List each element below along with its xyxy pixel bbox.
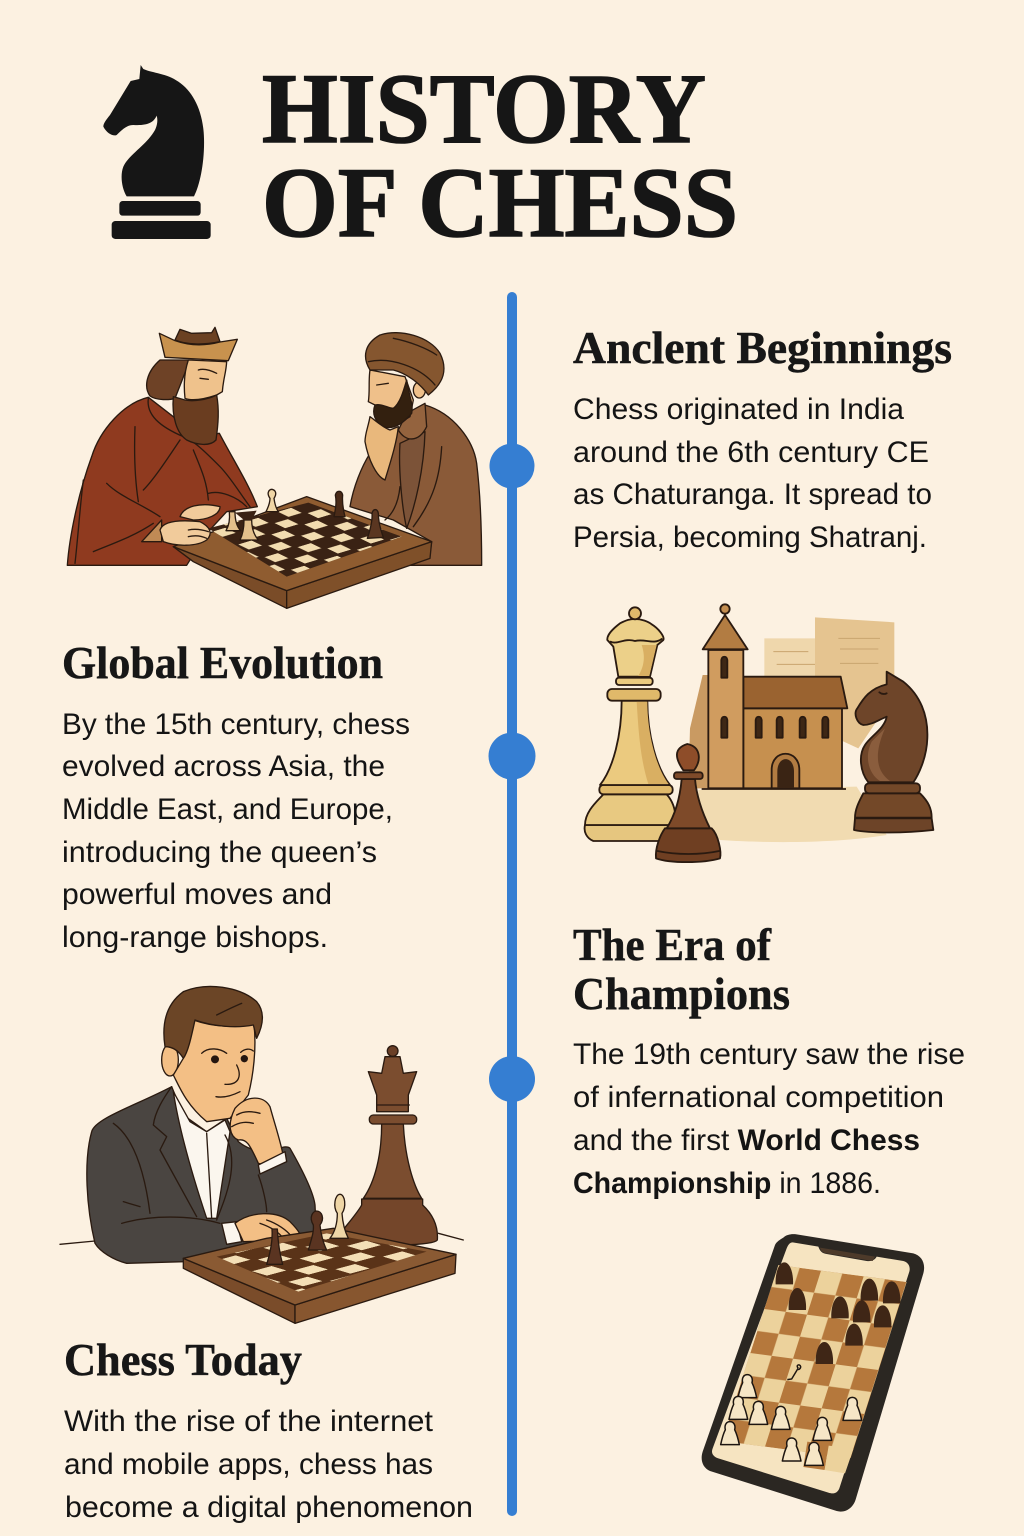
king figure	[67, 327, 257, 565]
text: global evolution body: introducing the queen’s	[62, 836, 377, 869]
small pieces	[267, 1194, 348, 1264]
title	[262, 53, 738, 258]
text: global evolution body: Middle East, and Europe,	[62, 793, 393, 826]
text: chess today body: With the rise of the internet	[64, 1405, 433, 1438]
text: chess today body	[64, 1405, 473, 1524]
black pieces	[776, 1262, 900, 1364]
illustration: man thinking over chess board	[60, 986, 463, 1323]
text: era of champions body	[573, 1038, 965, 1200]
phone notch	[820, 1248, 875, 1261]
illustration: king and scholar playing chess	[67, 327, 482, 608]
text: era of champions body: and the first World Chess	[573, 1124, 920, 1157]
text: global evolution body	[62, 708, 410, 954]
phone screen	[712, 1242, 910, 1493]
icon: black knight	[103, 65, 211, 239]
text: ancient beginnings body: Persia, becoming Shatranj.	[573, 521, 927, 554]
text: chess today body: and mobile apps, chess has	[64, 1448, 433, 1481]
title: HISTORY	[262, 53, 706, 164]
text: global evolution body: evolved across Asia, the	[62, 750, 385, 783]
pawn piece	[656, 744, 720, 862]
illustration: queen, church, pawn and knight	[585, 604, 933, 862]
timeline	[488, 292, 536, 1516]
text: global evolution body: long-range bishops.	[62, 921, 328, 954]
church	[702, 604, 847, 789]
text: ancient beginnings body: as Chaturanga. It spread to	[573, 478, 932, 511]
text: era of champions body: Championship in 1886.	[573, 1167, 881, 1200]
text: chess today body: become a digital phenomenon	[65, 1491, 473, 1524]
knight piece	[854, 672, 933, 832]
text: global evolution body: powerful moves and	[62, 878, 332, 911]
heading: Global Evolution: Global Evolution	[62, 638, 383, 688]
text: era of champions body: The 19th century saw the rise	[573, 1038, 965, 1071]
heading: Chess Today: Chess Today	[64, 1335, 302, 1385]
white pieces	[721, 1365, 862, 1465]
text: ancient beginnings body	[573, 393, 932, 554]
king hands	[142, 505, 220, 545]
large king piece	[333, 1046, 437, 1245]
phone body	[702, 1234, 924, 1512]
papers and ground	[688, 617, 894, 842]
queen piece	[585, 607, 675, 841]
title: OF CHESS	[262, 147, 738, 258]
heading: The Era of Champions	[573, 920, 790, 1019]
chess board	[173, 497, 432, 608]
heading: Ancient Beginnings: Anclent Beginnings	[573, 323, 952, 373]
text: global evolution body: By the 15th century, chess	[62, 708, 410, 741]
chess pieces	[226, 489, 383, 540]
scholar figure	[350, 333, 482, 565]
text: ancient beginnings body: Chess originated in India	[573, 393, 905, 426]
heading: The Era of Champions: The Era of	[573, 920, 772, 970]
man	[87, 986, 317, 1263]
board	[183, 1228, 456, 1323]
text: era of champions body: of infernational competition	[573, 1081, 944, 1114]
illustration: smartphone with chess app	[702, 1234, 924, 1512]
phone chess board	[722, 1265, 907, 1473]
heading: The Era of Champions: Champions	[573, 969, 790, 1019]
table line	[60, 1233, 463, 1244]
text: ancient beginnings body: around the 6th century CE	[573, 436, 929, 469]
